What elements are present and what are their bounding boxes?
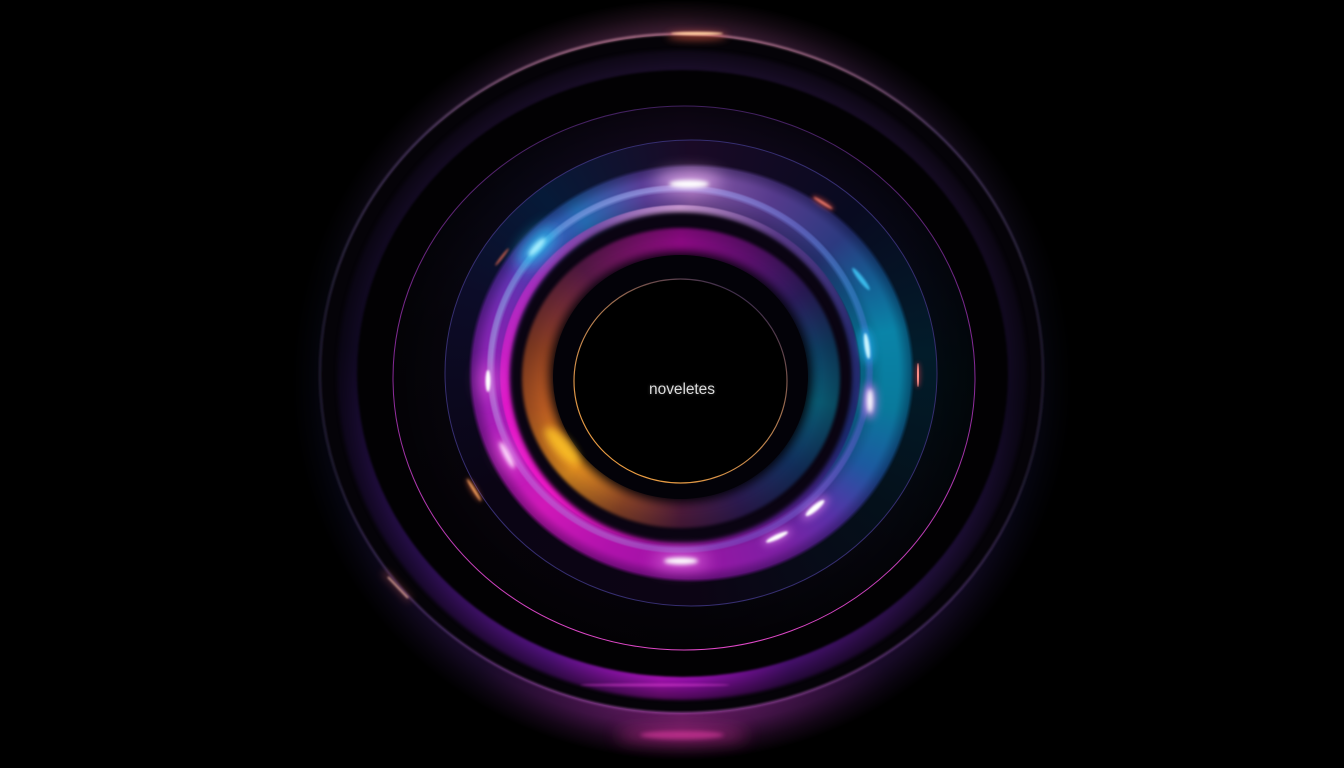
- ring: dark inner disc: [553, 255, 808, 499]
- infographic canvas: concentric glowing rings: [312, 5, 1052, 757]
- ring: tinted disc within pink ring: [393, 106, 975, 650]
- highlight: upper-right cyan streak: [850, 266, 872, 292]
- highlight: bottom pink flare: [616, 727, 748, 743]
- ring: outer outline: [320, 34, 1043, 713]
- center label: noveletes: [649, 381, 715, 398]
- ring: inner orange, magenta and teal band: [522, 228, 840, 528]
- highlight: upper-right orange streak: [810, 193, 836, 213]
- ring: dark halo around the colour band: [445, 140, 937, 606]
- ring: outer faint glow band: [292, 0, 1072, 760]
- highlight: upper-left cyan glow: [511, 220, 563, 274]
- highlight: bottom purple glow: [580, 684, 730, 686]
- ring: dark field inside outer outline: [320, 35, 1042, 713]
- ring: dark gap around the orange band: [510, 212, 852, 543]
- ring: dim purple band inside the outer outline: [337, 50, 1027, 700]
- highlight: top white glow: [657, 171, 721, 191]
- highlight: left white spot: [480, 363, 496, 399]
- ring: bright magenta band: [499, 204, 861, 546]
- highlight: right white spot: [863, 383, 877, 419]
- ring: periwinkle highlight strip: [486, 184, 874, 554]
- highlight: top orange flare: [667, 32, 727, 40]
- highlight: lower-left white spot: [491, 434, 523, 476]
- highlight: right red streak: [915, 362, 921, 388]
- highlight: yellow glow on orange band: [540, 423, 584, 469]
- ring: thin pink line: [393, 106, 975, 650]
- highlight: upper-left orange streak: [494, 248, 510, 266]
- center disc: [574, 279, 787, 483]
- ring: thin violet line: [445, 140, 937, 606]
- highlight: lower-right white spot B: [798, 492, 832, 524]
- highlight: bottom white glow: [653, 553, 709, 569]
- highlight: lower-right white spot A: [760, 526, 794, 548]
- highlight: right cyan spot: [858, 327, 876, 365]
- highlight: lower-left orange streak: [463, 476, 485, 504]
- ring: black gap inside the purple band: [357, 70, 1008, 677]
- ring: outer blue-purple colour band: [468, 163, 915, 583]
- highlight: lower-left outer flare: [384, 572, 410, 600]
- ring: core outline: [574, 279, 787, 483]
